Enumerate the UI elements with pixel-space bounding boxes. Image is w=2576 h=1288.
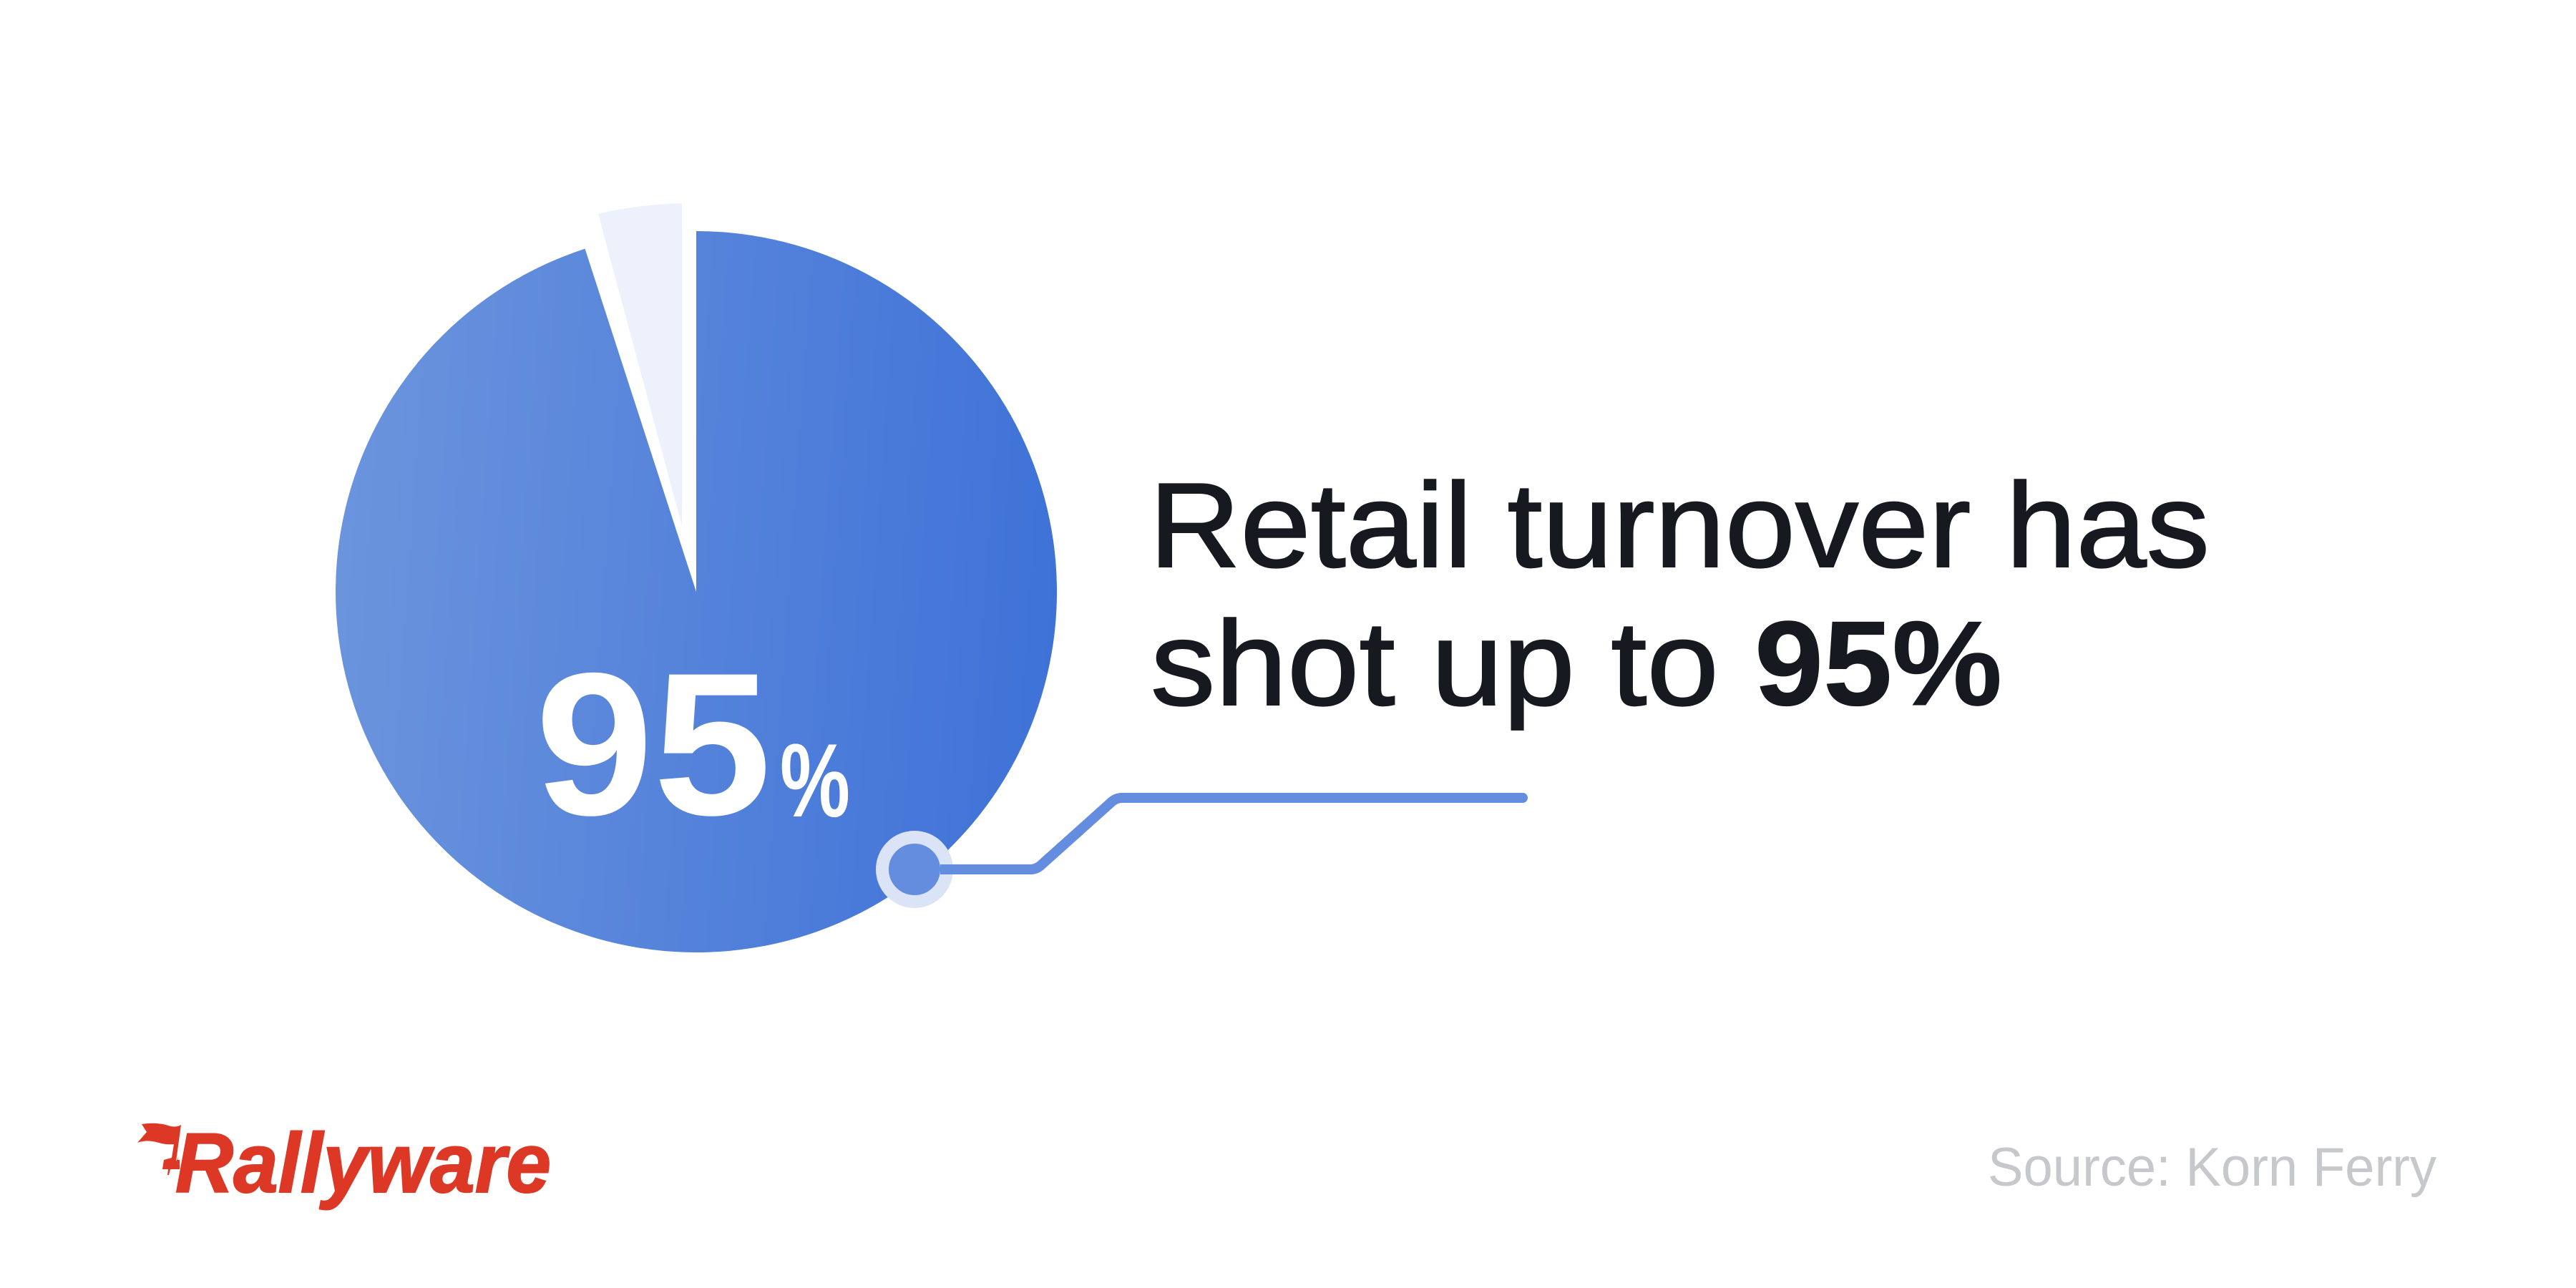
- headline: [1149, 458, 2210, 731]
- logo flag: [137, 1123, 181, 1175]
- pie slice: 95 percent: [336, 231, 1057, 952]
- source note: Source: Korn Ferry: [1988, 1137, 2436, 1198]
- logo: Rallyware: [137, 1116, 551, 1211]
- headline: Retail turnover has: [1149, 458, 2210, 592]
- callout connector: [882, 798, 1523, 902]
- headline: 95%: [1755, 596, 2002, 731]
- pie value label: 95: [535, 631, 771, 858]
- pie slice: remaining 5 percent: [598, 203, 682, 526]
- connector ring: [882, 837, 947, 902]
- pie value label: %: [780, 722, 850, 839]
- headline: shot up to: [1151, 596, 1719, 731]
- logo wordmark: Rallyware: [175, 1116, 551, 1211]
- pie chart: [336, 203, 1057, 952]
